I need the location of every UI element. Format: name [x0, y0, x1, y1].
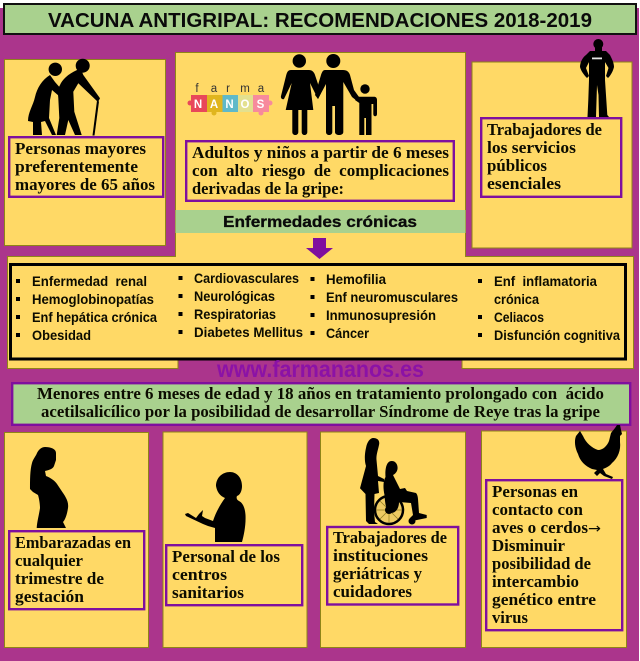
- text: pregnant women: trimestre de: [15, 569, 104, 588]
- logo: farmananos: [188, 83, 272, 116]
- text: poultry and pig contact: contacto con: [492, 500, 583, 519]
- text: geriatric workers: instituciones: [333, 546, 429, 565]
- band: chronic diseases: Enfermedades crónicas: [223, 214, 417, 231]
- logo: farmananos: S: [257, 99, 265, 111]
- text: poultry and pig contact: posibilidad de: [492, 554, 591, 573]
- list column 3: [310, 272, 458, 341]
- list column 2: Diabetes Mellitus: [194, 325, 303, 340]
- icon: pregnant woman: [30, 447, 68, 528]
- icon: elderly couple: [28, 59, 100, 136]
- text: public service workers: los servicios: [487, 138, 577, 157]
- text: poultry and pig contact: aves o cerdos: [492, 518, 589, 537]
- text: geriatric workers: cuidadores: [333, 582, 413, 601]
- title: VACUNA ANTIGRIPAL: RECOMENDACIONES 2018-2019: [48, 9, 592, 32]
- website url: www.farmananos.es: [216, 356, 424, 382]
- callout: minors on aspirin: acetilsalicílico por la posibilidad de desarrollar Síndrome de Reye tras la gripe: [41, 402, 600, 421]
- logo: farmananos: A: [210, 99, 218, 111]
- panel: health staff: [163, 432, 307, 648]
- text: public service workers: esenciales: [487, 174, 562, 193]
- icon: family: [281, 54, 377, 135]
- icon: hen: [575, 425, 622, 479]
- text: pregnant women: [9, 531, 144, 609]
- list column 2: Respiratorias: [194, 307, 276, 322]
- text: adults and children at risk: con alto riesgo de complicaciones: [192, 161, 450, 180]
- text: adults and children at risk: [186, 141, 454, 201]
- panel: elderly: [4, 59, 166, 246]
- text: older people: [9, 137, 163, 197]
- icon: caregiver and wheelchair: [360, 438, 427, 524]
- text: health staff: sanitarios: [172, 583, 245, 602]
- title: [4, 4, 636, 34]
- text: older people: Personas mayores: [15, 139, 147, 158]
- text: older people: preferentemente: [15, 157, 138, 176]
- list column 4: crónica: [494, 292, 539, 307]
- text: adults and children at risk: Adultos y niños a partir de 6 meses: [192, 143, 450, 162]
- text: poultry and pig contact: Personas en: [492, 482, 578, 501]
- list column 2: Cardiovasculares: [194, 271, 299, 286]
- callout: minors on aspirin: Menores entre 6 meses de edad y 18 años en tratamiento prolongado con ácido: [37, 384, 604, 403]
- panel: pregnant women: [4, 432, 148, 648]
- list column 2: Neurológicas: [194, 289, 275, 304]
- band: chronic diseases: [176, 210, 466, 233]
- text: poultry and pig contact: virus: [492, 608, 529, 627]
- list column 1: [16, 274, 157, 343]
- text: geriatric workers: Trabajadores de: [333, 528, 447, 547]
- list column 3: Inmunosupresión: [326, 308, 436, 323]
- list column 1: Enf hepática crónica: [32, 310, 157, 325]
- list column 3: Enf neuromusculares: [326, 290, 458, 305]
- logo: farmananos: f: [195, 83, 199, 95]
- list column 4: Enf inflamatoria: [494, 274, 597, 289]
- text: poultry and pig contact: [486, 480, 622, 630]
- list column 3: Hemofilia: [326, 272, 386, 287]
- panel: chronic diseases background: [8, 52, 634, 368]
- logo: farmananos: N: [194, 99, 202, 111]
- text: pregnant women: Embarazadas en: [15, 533, 131, 552]
- list column 3: Cáncer: [326, 326, 370, 341]
- list column 1: Obesidad: [32, 328, 91, 343]
- logo: farmananos: N: [225, 99, 234, 111]
- text: older people: mayores de 65 años: [15, 175, 156, 194]
- panel: poultry and pig contact: [482, 425, 626, 648]
- list column 2: [178, 271, 303, 340]
- text: health staff: Personal de los: [172, 547, 281, 566]
- list column 4: [478, 274, 620, 343]
- list column 1: Hemoglobinopatías: [32, 292, 154, 307]
- logo: farmananos: r: [226, 83, 230, 95]
- text: adults and children at risk: derivadas de la gripe:: [192, 179, 344, 198]
- text: poultry and pig contact: intercambio: [492, 572, 579, 591]
- logo: farmananos: a: [258, 83, 265, 95]
- text: pregnant women: cualquier: [15, 551, 83, 570]
- icon: health worker: [185, 472, 246, 542]
- arrow: down: [306, 238, 333, 259]
- text: pregnant women: gestación: [15, 587, 84, 606]
- logo: farmananos: m: [240, 83, 250, 95]
- text: poultry and pig contact: Disminuir: [492, 536, 565, 555]
- text: geriatric workers: geriátricas y: [333, 564, 423, 583]
- text: poultry and pig contact: →: [588, 521, 601, 537]
- list column 1: Enfermedad renal: [32, 274, 147, 289]
- panel: geriatric workers: [320, 432, 466, 648]
- panel: list of chronic diseases: [10, 264, 626, 359]
- text: geriatric workers: [327, 527, 458, 604]
- callout: minors on aspirin: [12, 383, 630, 425]
- text: public service workers: públicos: [487, 156, 548, 175]
- text: health staff: centros: [172, 565, 228, 584]
- panel: public service workers: [472, 39, 632, 248]
- logo: farmananos: a: [211, 83, 218, 95]
- logo: farmananos: O: [241, 99, 250, 111]
- text: poultry and pig contact: genético entre: [492, 590, 596, 609]
- text: public service workers: [481, 118, 621, 197]
- text: health staff: [166, 545, 302, 605]
- list column 4: Disfunción cognitiva: [494, 328, 620, 343]
- icon: police officer: [580, 39, 614, 117]
- text: public service workers: Trabajadores de: [487, 120, 602, 139]
- list column 4: Celiacos: [494, 310, 544, 325]
- panel: adults and children: [176, 54, 466, 259]
